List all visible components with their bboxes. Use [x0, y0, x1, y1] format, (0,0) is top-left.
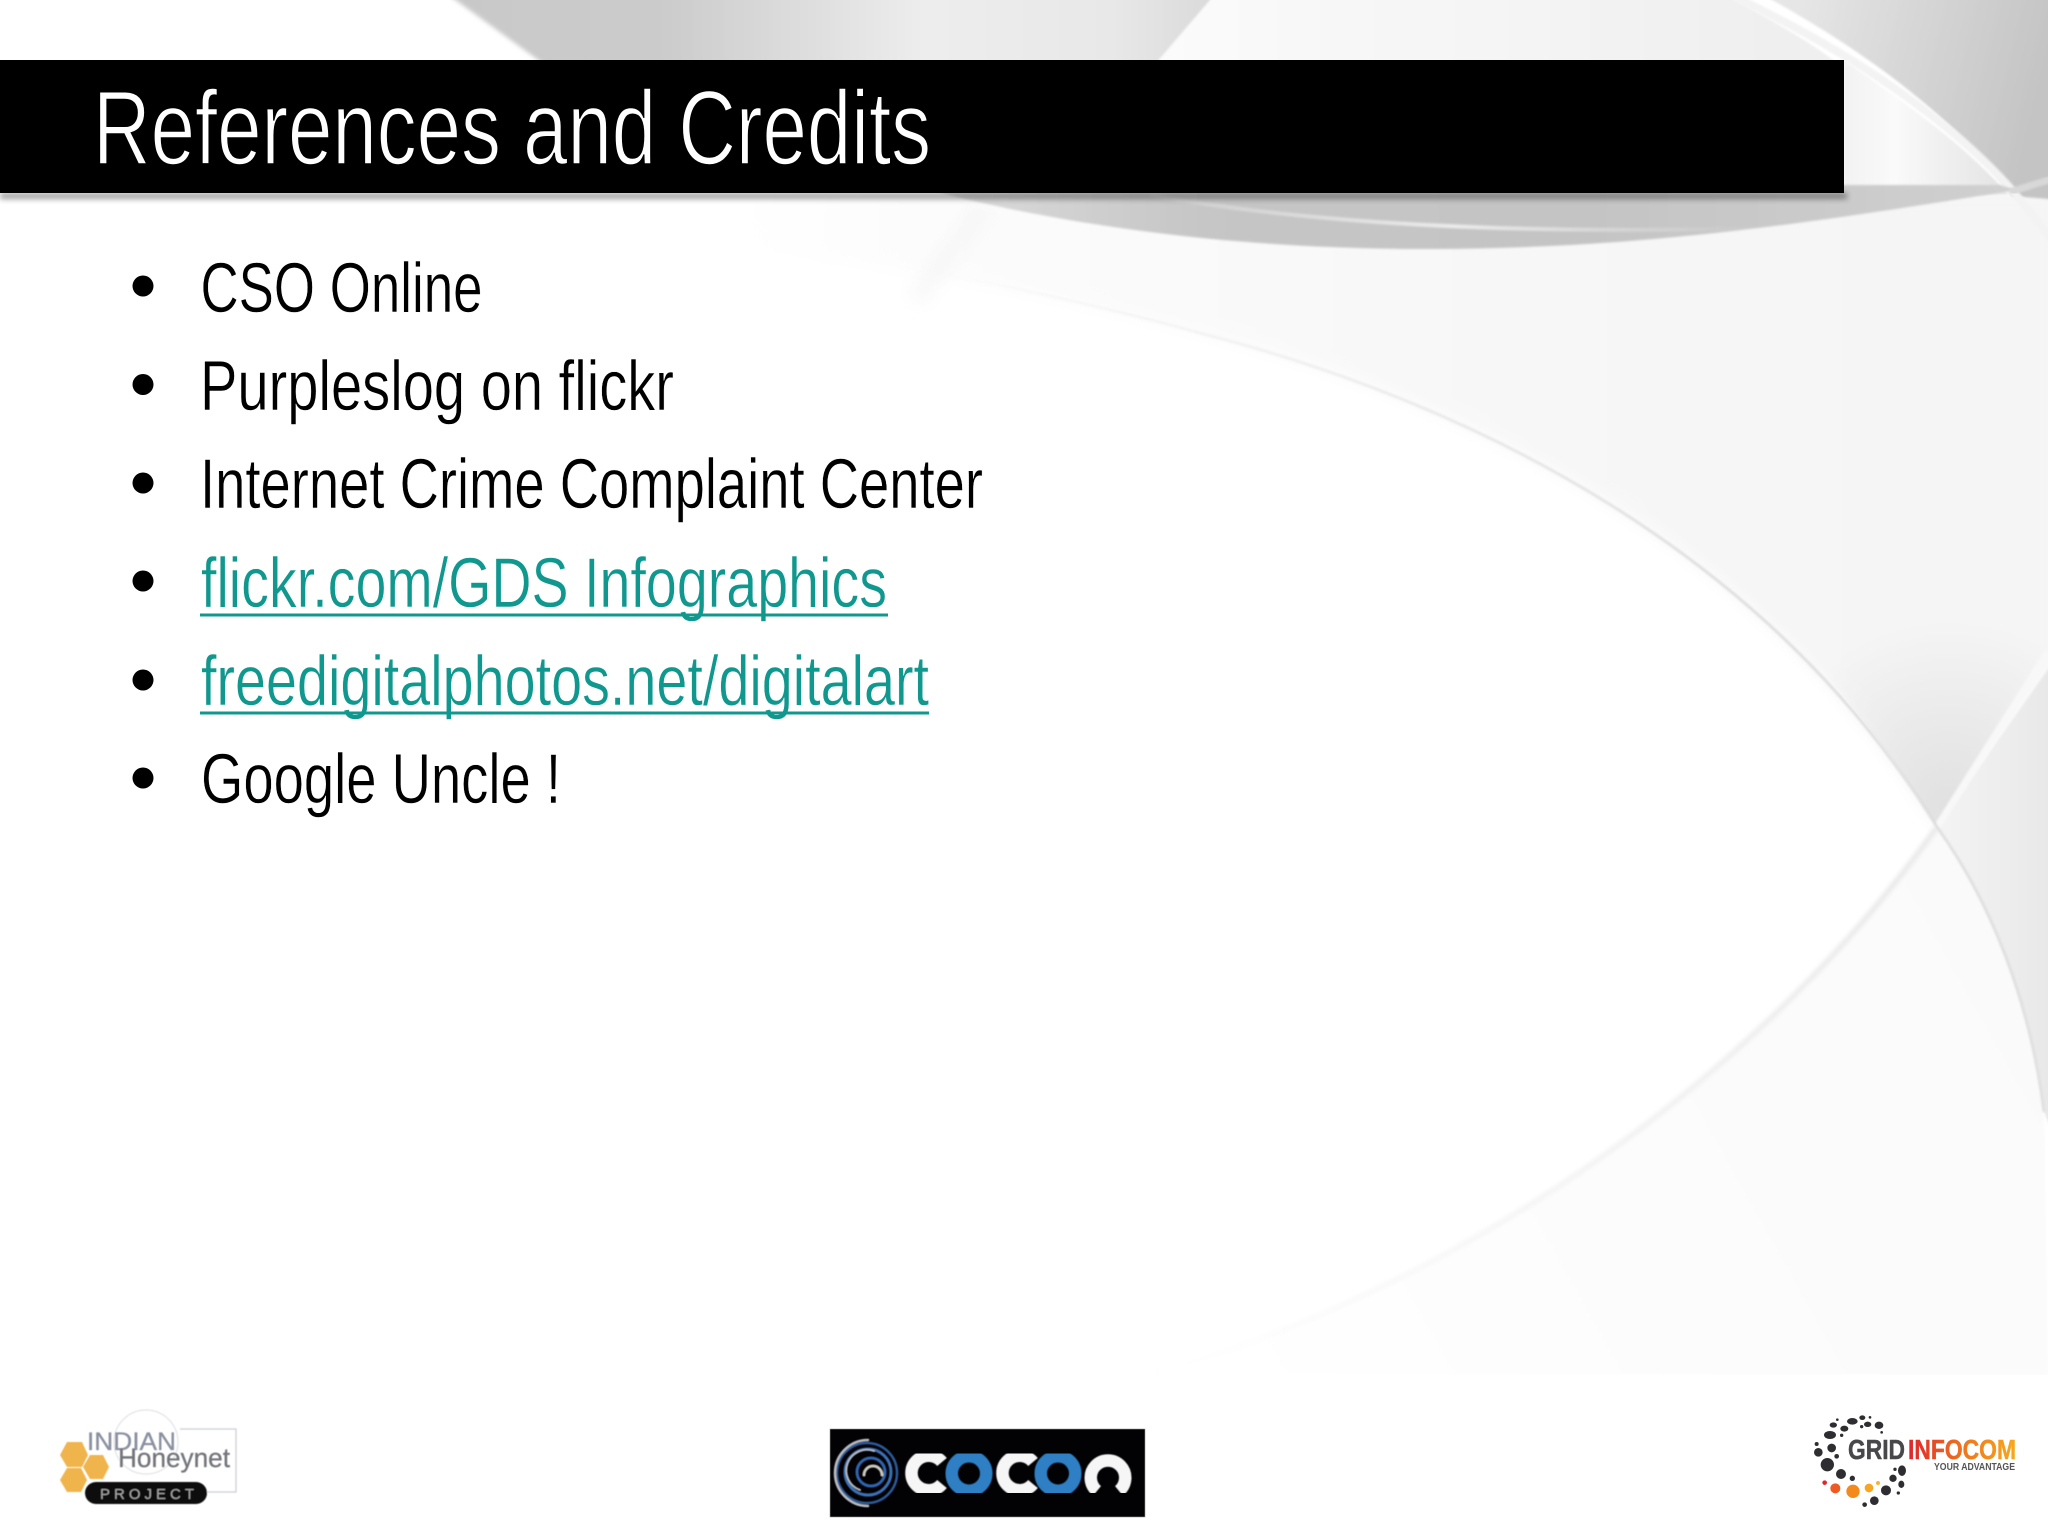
honeycomb icon — [60, 1442, 109, 1492]
logo: COCON — [830, 1429, 1145, 1517]
logo: Grid Infocom: INFOCOM — [1908, 1434, 2016, 1465]
title bar — [0, 60, 1844, 193]
logo: Indian Honeynet Project: INDIAN — [87, 1428, 176, 1456]
logo: Grid Infocom: GRID — [1848, 1434, 1905, 1465]
item: Google Uncle — [132, 739, 561, 818]
item: CSO Online — [132, 248, 482, 327]
title: References and Credits — [93, 70, 931, 187]
item: freedigitalphotos link: freedigitalphotos.net/digitalart — [201, 641, 929, 720]
ring letters — [911, 1456, 1125, 1491]
logo: Grid Infocom: YOUR ADVANTAGE — [1934, 1461, 2015, 1473]
item: CSO Online: CSO Online — [200, 248, 482, 327]
logo: Grid Infocom — [1814, 1415, 2016, 1507]
title bar shadow — [0, 193, 1847, 199]
logo: Indian Honeynet Project: PROJECT — [100, 1486, 194, 1503]
dotted ring icon — [1814, 1415, 1906, 1507]
spiral icon — [835, 1440, 897, 1506]
item: Purpleslog on flickr: Purpleslog on flickr — [200, 346, 674, 425]
references list — [132, 248, 983, 818]
item: Internet Crime Complaint Center: Internet Crime Complaint Center — [200, 444, 983, 523]
logo: Indian Honeynet Project — [60, 1410, 236, 1504]
item: Google Uncle: Google Uncle ! — [201, 739, 561, 818]
logo: Indian Honeynet Project: Honeynet — [118, 1443, 230, 1473]
item: flickr link: flickr.com/GDS Infographics — [201, 543, 887, 622]
